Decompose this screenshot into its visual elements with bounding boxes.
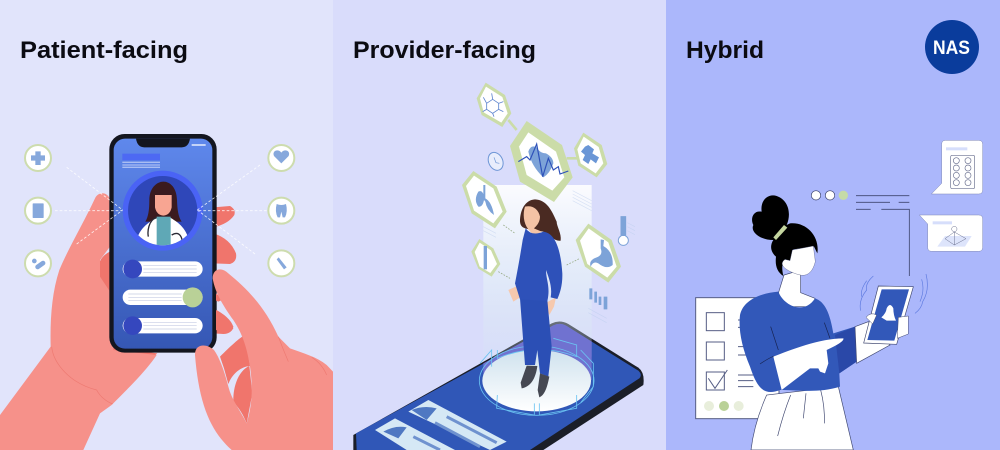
checklist board xyxy=(696,298,779,419)
isometric phone xyxy=(353,321,644,450)
heartbeat line xyxy=(518,144,568,177)
logo: NAS: NAS xyxy=(933,38,970,59)
hair xyxy=(752,195,818,276)
fingers behind phone xyxy=(97,206,236,363)
molecule glyph xyxy=(483,93,503,117)
tablet xyxy=(864,286,913,344)
right hand xyxy=(195,269,333,450)
hexagon icons xyxy=(462,83,621,283)
woman upper body xyxy=(740,195,927,392)
forearm cuff xyxy=(855,322,890,363)
woman figure xyxy=(508,199,562,397)
face xyxy=(782,246,815,275)
dashed links xyxy=(498,225,580,278)
hair tie xyxy=(773,225,787,240)
sweater xyxy=(740,292,857,392)
speech bubble: body scan xyxy=(919,215,983,251)
heading: Provider-facing: Provider-facing xyxy=(353,37,536,64)
panel: provider-facing xyxy=(333,0,666,450)
logo: NAS xyxy=(925,20,979,74)
clock icon xyxy=(485,150,506,173)
hexagon glyphs xyxy=(476,145,613,309)
panel: patient-facing xyxy=(0,0,333,450)
status dots xyxy=(811,191,848,200)
panel: hybrid xyxy=(666,0,1000,450)
left hand xyxy=(0,193,157,450)
skirt xyxy=(751,387,853,450)
dashed connectors xyxy=(55,165,267,254)
hologram panel xyxy=(483,185,592,357)
vibration marks xyxy=(860,274,927,313)
pointing hand xyxy=(773,338,843,390)
illustration: woman with tablet xyxy=(696,140,983,450)
connector xyxy=(856,196,909,276)
purple hologram base xyxy=(483,324,592,380)
platform disc xyxy=(482,350,591,411)
platform rings xyxy=(479,338,594,415)
faint data lines xyxy=(483,191,635,323)
heading: Hybrid: Hybrid xyxy=(686,37,764,64)
toggle rows xyxy=(123,260,203,335)
speech bubble: pill pack xyxy=(931,140,983,194)
illustration: hands holding phone xyxy=(0,134,294,450)
phone xyxy=(109,134,217,353)
illustration: woman on phone hologram xyxy=(353,83,644,450)
heading: Patient-facing: Patient-facing xyxy=(20,37,188,64)
health icons xyxy=(25,145,294,276)
neck xyxy=(778,270,815,307)
doctor avatar xyxy=(138,182,188,246)
thermometer xyxy=(618,217,628,245)
